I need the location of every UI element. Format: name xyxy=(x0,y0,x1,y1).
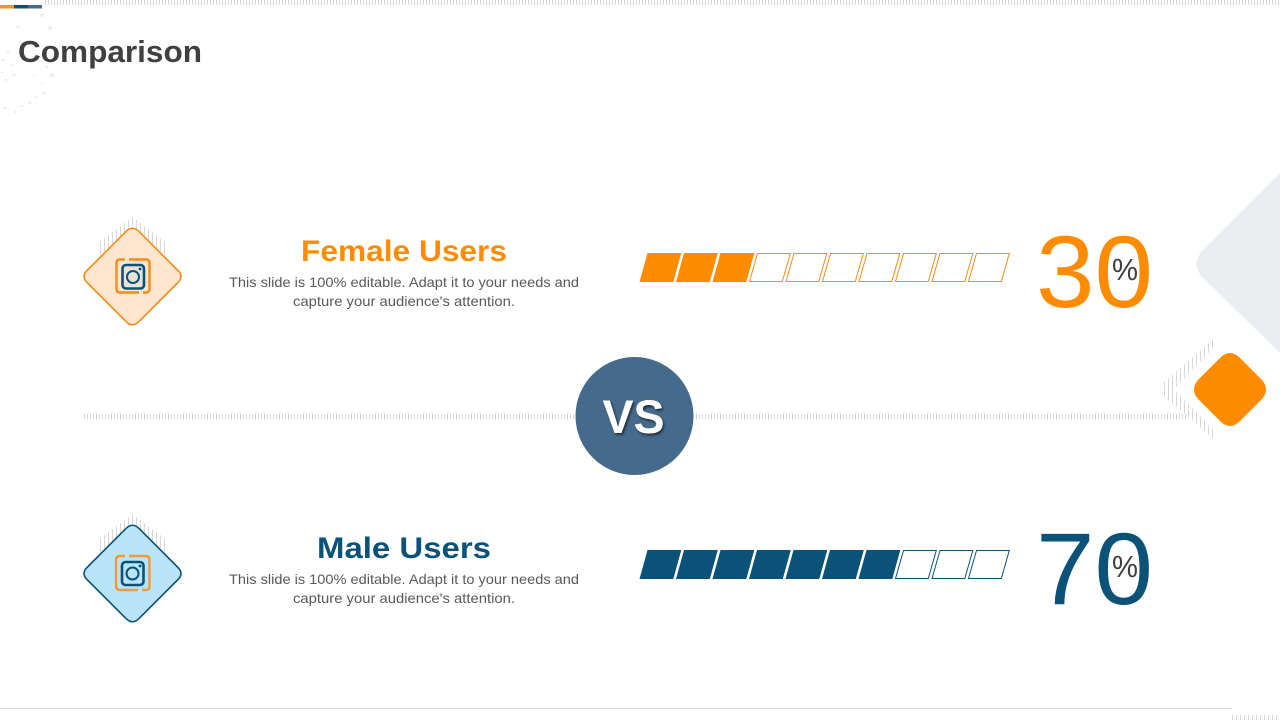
top accent bars xyxy=(0,5,42,8)
decorative dots xyxy=(2,13,54,114)
description: male users xyxy=(229,571,579,606)
divider line xyxy=(84,414,574,419)
title: Comparison xyxy=(18,34,202,69)
panel: female users xyxy=(84,215,1153,329)
orange diamond xyxy=(1194,353,1266,426)
icon: male diamond xyxy=(84,514,181,622)
description: female users: This slide is 100% editable. Adapt it to your needs and xyxy=(229,274,579,290)
value: 70 percent: % xyxy=(1112,549,1138,584)
value: 30 percent: % xyxy=(1112,252,1138,287)
value: 70 percent: 70 xyxy=(1036,512,1153,626)
icon: female diamond xyxy=(84,217,181,325)
description: female users: capture your audience's attention. xyxy=(293,293,515,309)
hatched chevron xyxy=(1164,337,1216,441)
VS badge xyxy=(576,357,694,475)
description: male users: This slide is 100% editable. Adapt it to your needs and xyxy=(229,571,579,587)
VS badge: VS xyxy=(602,390,664,443)
description: male users: capture your audience's attention. xyxy=(293,590,515,606)
value: 30 percent: 30 xyxy=(1036,215,1153,329)
panel: male users xyxy=(84,512,1153,626)
heading: female users: Female Users xyxy=(301,235,507,268)
progress bar: 30 percent xyxy=(640,253,1009,282)
background diamond xyxy=(1196,173,1280,353)
heading: male users: Male Users xyxy=(317,532,491,565)
description: female users xyxy=(229,274,579,309)
progress bar: 70 percent xyxy=(640,550,1009,579)
